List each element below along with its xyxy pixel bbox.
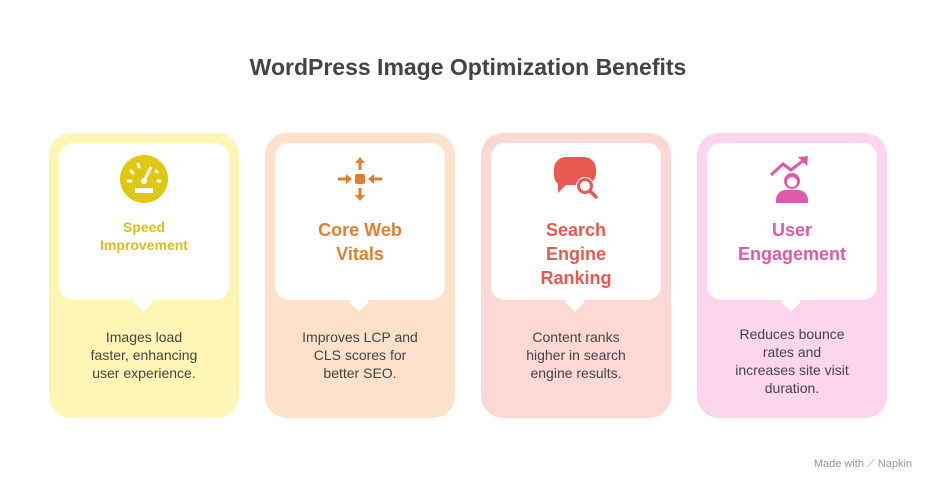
text block: engine results. — [530, 365, 622, 381]
heading — [540, 220, 612, 288]
heading: Vitals — [336, 244, 384, 264]
icon: chat search — [554, 157, 598, 199]
heading — [100, 219, 188, 253]
icon: arrows — [338, 157, 382, 201]
footer credit: Made with ⟋ Napkin — [814, 458, 912, 470]
title: WordPress Image Optimization Benefits — [250, 54, 686, 80]
text block: user experience. — [92, 365, 196, 381]
text block: Images load — [106, 329, 182, 345]
text block — [526, 329, 626, 381]
heading: Search — [546, 220, 606, 240]
text block: Reduces bounce — [739, 326, 845, 342]
text block: increases site visit — [735, 362, 849, 378]
heading: User — [772, 220, 812, 240]
panel: user engagement — [697, 133, 887, 418]
text block — [302, 329, 418, 381]
panel: search engine ranking — [481, 133, 671, 418]
heading: Improvement — [100, 237, 188, 253]
text block: rates and — [763, 344, 821, 360]
heading: Speed — [123, 219, 165, 235]
text block: Improves LCP and — [302, 329, 418, 345]
text block: higher in search — [526, 347, 626, 363]
panel: speed improvement — [49, 133, 239, 418]
text block: Content ranks — [532, 329, 620, 345]
heading — [738, 220, 846, 264]
panel: core web vitals — [265, 133, 455, 418]
heading: Ranking — [540, 268, 612, 288]
heading: Core Web — [318, 220, 402, 240]
text block: CLS scores for — [314, 347, 406, 363]
heading — [318, 220, 402, 264]
heading: Engine — [546, 244, 606, 264]
heading: Engagement — [738, 244, 846, 264]
text block — [90, 329, 197, 381]
text block: better SEO. — [323, 365, 397, 381]
icon: user growth — [770, 156, 808, 203]
text block: duration. — [765, 380, 819, 396]
text block — [735, 326, 849, 396]
icon: speedometer — [120, 155, 168, 203]
text block: faster, enhancing — [91, 347, 197, 363]
